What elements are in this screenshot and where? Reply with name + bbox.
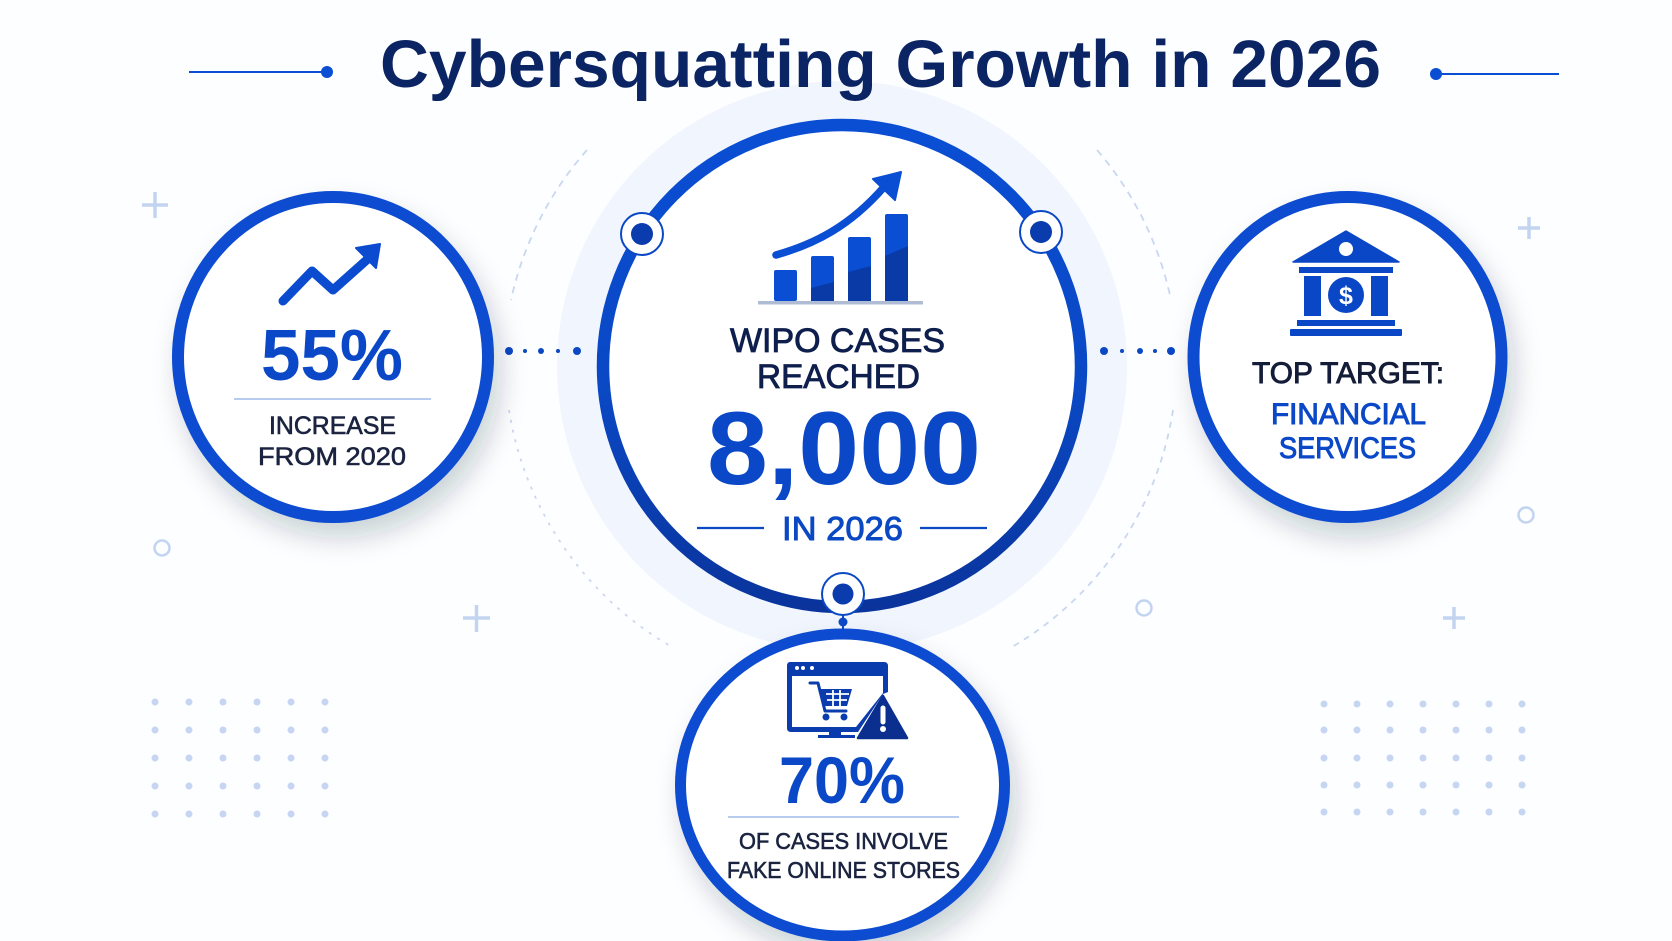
- text: increase from 2020: INCREASE: [269, 412, 396, 440]
- icon: storefront monitor with warning: [787, 662, 907, 738]
- connector: right dots: [1100, 347, 1175, 355]
- icon: bank with dollar coin: [1290, 231, 1402, 336]
- heading: WIPO cases reached: REACHED: [757, 358, 920, 396]
- title: Cybersquatting Growth in 2026: [380, 27, 1381, 102]
- stat: 70%: 70%: [779, 743, 905, 817]
- text: of cases involve fake online stores: FAKE ONLINE STORES: [727, 857, 960, 883]
- node: center ring upper left: [621, 213, 663, 255]
- icon: rising bar chart: [758, 172, 923, 304]
- icon: bank with dollar coin: $: [1339, 282, 1353, 310]
- panel: 55% increase: [178, 197, 488, 517]
- panel: top target: [1194, 197, 1502, 517]
- connector: left dots: [505, 347, 581, 355]
- label: financial services: [1271, 398, 1426, 465]
- text: of cases involve fake online stores: OF CASES INVOLVE: [739, 828, 948, 854]
- icon: trending arrow: [283, 244, 380, 301]
- dot grid: left: [152, 698, 328, 818]
- text: of cases involve fake online stores: [727, 828, 960, 883]
- panel: fake online stores: [680, 634, 1004, 936]
- label: financial services: SERVICES: [1279, 432, 1416, 465]
- decorative plus and ring marks: [142, 192, 1540, 632]
- node: center ring upper right: [1020, 211, 1062, 253]
- left ring: [178, 197, 488, 517]
- label: top target: TOP TARGET:: [1252, 357, 1444, 390]
- center halo: [557, 81, 1127, 651]
- label: financial services: FINANCIAL: [1271, 398, 1426, 431]
- divider: [728, 816, 959, 818]
- title accent line: left: [189, 66, 333, 78]
- right ring: [1194, 197, 1502, 517]
- text: increase from 2020: [258, 412, 406, 471]
- big number: 8,000: 8,000: [707, 391, 981, 507]
- caption: in 2026: IN 2026: [782, 510, 903, 547]
- heading: WIPO cases reached: WIPO CASES: [730, 322, 945, 360]
- divider: [234, 398, 431, 400]
- heading: WIPO cases reached: [730, 322, 945, 396]
- node: link between center and bottom circles: [822, 573, 864, 630]
- dot grid: right: [1320, 700, 1526, 816]
- bottom ring: [680, 634, 1004, 936]
- center ring: [603, 125, 1081, 607]
- stat: 55%: 55%: [261, 316, 403, 396]
- title accent line: right: [1430, 68, 1559, 80]
- dashed orbit arcs: [509, 150, 1173, 647]
- text: increase from 2020: FROM 2020: [258, 443, 406, 471]
- panel: center WIPO cases: [603, 125, 1081, 607]
